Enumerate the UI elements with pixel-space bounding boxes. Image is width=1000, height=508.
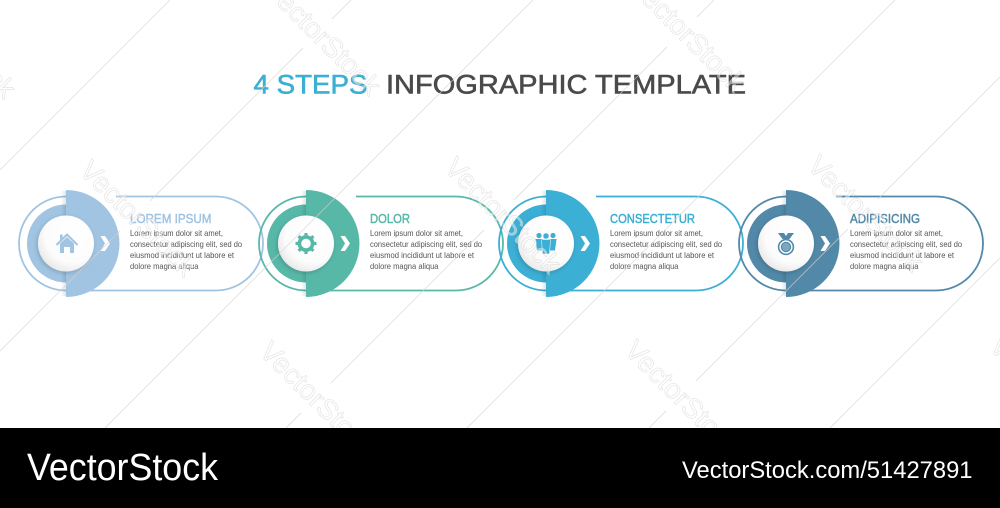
body text: consectetur adipiscing elit, sed do bbox=[130, 239, 242, 249]
body text bbox=[370, 228, 482, 271]
semicircle shadow bbox=[541, 191, 546, 296]
heading: DOLOR bbox=[370, 212, 410, 226]
semicircle bbox=[786, 190, 839, 297]
semicircle shadow bbox=[781, 191, 786, 296]
white circle bbox=[38, 216, 94, 272]
outline pill bbox=[80, 196, 263, 290]
heading: CONSECTETUR bbox=[610, 212, 695, 226]
outer ring bbox=[739, 196, 786, 290]
step 3: consectetur bbox=[499, 190, 743, 297]
semicircle bbox=[306, 190, 359, 297]
body text: eiusmod incididunt ut labore et bbox=[370, 250, 475, 260]
watermark text: VectorStock bbox=[619, 334, 747, 463]
step 4: adipisicing bbox=[739, 190, 983, 297]
outline pill bbox=[800, 196, 983, 290]
chevron bbox=[340, 236, 350, 251]
title: INFOGRAPHIC TEMPLATE bbox=[386, 70, 746, 100]
icon: house bbox=[56, 234, 78, 253]
white circle bbox=[518, 216, 574, 272]
body text: Lorem ipsum dolor sit amet, bbox=[130, 228, 223, 238]
heading: LOREM IPSUM bbox=[130, 212, 212, 226]
semicircle shadow bbox=[61, 191, 66, 296]
footer url: VectorStock.com/51427891 bbox=[682, 457, 972, 484]
white circle bbox=[758, 216, 814, 272]
watermark text: VectorStock bbox=[802, 149, 930, 278]
body text: Lorem ipsum dolor sit amet, bbox=[610, 228, 703, 238]
inner disc bbox=[507, 204, 546, 282]
body text: dolore magna aliqua bbox=[370, 261, 439, 271]
icon: people bbox=[536, 233, 556, 254]
body text: eiusmod incididunt ut labore et bbox=[850, 250, 955, 260]
watermark text: VectorStock bbox=[74, 154, 202, 283]
watermark text: VectorStock bbox=[439, 151, 567, 280]
footer band bbox=[0, 428, 1000, 508]
body text: eiusmod incididunt ut labore et bbox=[610, 250, 715, 260]
white circle bbox=[278, 216, 334, 272]
inner disc bbox=[267, 204, 306, 282]
chevron bbox=[580, 236, 590, 251]
icon: medal bbox=[778, 233, 794, 254]
inner disc bbox=[27, 204, 66, 282]
body text bbox=[130, 228, 242, 271]
semicircle bbox=[66, 190, 119, 297]
body text: Lorem ipsum dolor sit amet, bbox=[370, 228, 463, 238]
watermark text: VectorStock bbox=[254, 335, 382, 464]
outline pill bbox=[320, 196, 503, 290]
title bbox=[254, 70, 746, 100]
heading: ADIPISICING bbox=[850, 212, 920, 226]
outer ring bbox=[259, 196, 306, 290]
step 2: dolor bbox=[259, 190, 503, 297]
title: 4 STEPS bbox=[254, 70, 368, 100]
body text: dolore magna aliqua bbox=[850, 261, 919, 271]
body text: consectetur adipiscing elit, sed do bbox=[370, 239, 482, 249]
body text: dolore magna aliqua bbox=[130, 261, 199, 271]
chevron bbox=[820, 236, 830, 251]
body text bbox=[850, 228, 962, 271]
body text: eiusmod incididunt ut labore et bbox=[130, 250, 235, 260]
body text: consectetur adipiscing elit, sed do bbox=[850, 239, 962, 249]
semicircle bbox=[546, 190, 599, 297]
body text: Lorem ipsum dolor sit amet, bbox=[850, 228, 943, 238]
outline pill bbox=[560, 196, 743, 290]
chevron bbox=[100, 236, 110, 251]
body text: dolore magna aliqua bbox=[610, 261, 679, 271]
step 1: lorem ipsum bbox=[19, 190, 263, 297]
body text: consectetur adipiscing elit, sed do bbox=[610, 239, 722, 249]
outer ring bbox=[19, 196, 66, 290]
icon: gear bbox=[296, 233, 316, 254]
body text bbox=[610, 228, 722, 271]
semicircle shadow bbox=[301, 191, 306, 296]
footer logo: VectorStock bbox=[27, 447, 219, 489]
inner disc bbox=[747, 204, 786, 282]
outer ring bbox=[499, 196, 546, 290]
